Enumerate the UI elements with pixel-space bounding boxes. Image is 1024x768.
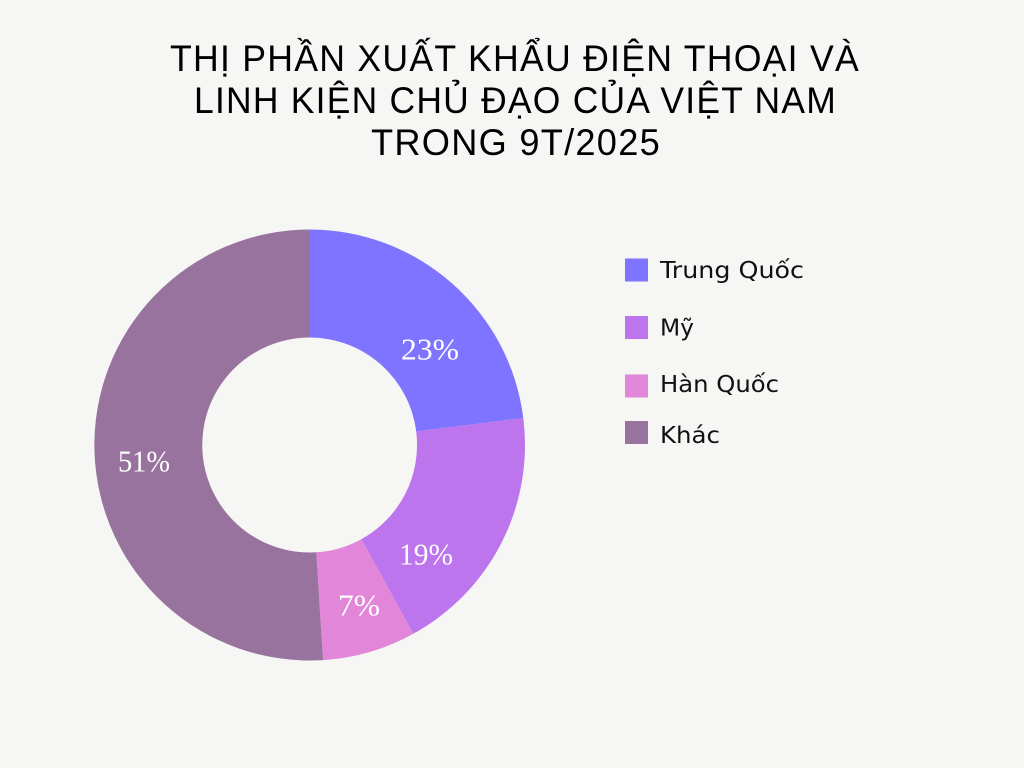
legend item: Mỹ: Mỹ [660,316,694,342]
legend item: Hàn Quốc: Hàn Quốc [660,372,779,398]
slice: Mỹ 19% [361,418,525,634]
value label: 19%: 19% [399,536,453,572]
title: TRONG 9T/2025 [371,121,661,163]
value label: 7%: 7% [338,588,380,622]
donut chart [94,230,525,660]
legend item: Khác [625,421,720,449]
slice: Khác 51% [94,230,323,660]
value label: 23%: 23% [401,332,459,366]
legend [625,258,804,449]
legend item: Mỹ [625,316,694,342]
legend item: Trung Quốc: Trung Quốc [659,258,804,284]
title: THỊ PHẦN XUẤT KHẨU ĐIỆN THOẠI VÀ [170,37,860,79]
title [170,37,860,163]
slice: Hàn Quốc 7% [316,539,413,660]
legend item: Khác: Khác [660,423,720,449]
slice: Trung Quốc 23% [310,230,523,432]
value label: 51%: 51% [118,444,170,478]
title: LINH KIỆN CHỦ ĐẠO CỦA VIỆT NAM [194,79,837,121]
